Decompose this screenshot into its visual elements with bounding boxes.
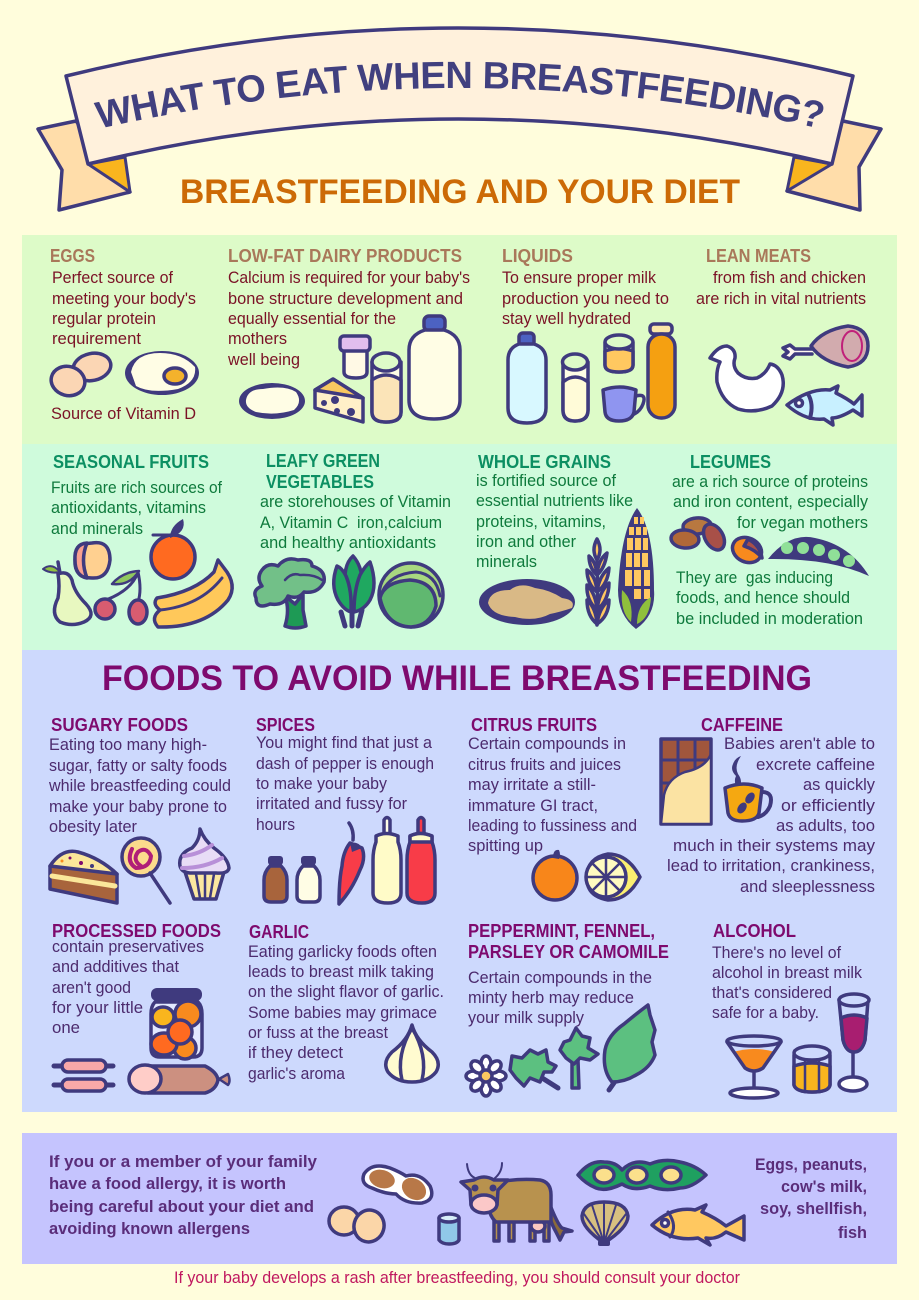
text: lean meats description	[696, 268, 866, 308]
icon: chicken, ham and fish	[710, 326, 868, 425]
section: leafy green vegetables	[255, 451, 451, 628]
section: processed foods: PROCESSED FOODS	[52, 921, 221, 941]
text: spices description: hours	[256, 815, 295, 834]
text: dairy description: equally essential for the	[228, 309, 396, 328]
list: common allergens: cow's milk,	[781, 1177, 867, 1196]
text: herbs description	[468, 968, 652, 1027]
icon: cow	[461, 1163, 572, 1241]
list: common allergens	[755, 1155, 867, 1242]
section: liquids: LIQUIDS	[502, 246, 573, 266]
text: sugary foods description: make your baby prone to	[49, 797, 227, 816]
section: alcohol	[712, 921, 869, 1098]
section: whole grains: WHOLE GRAINS	[478, 452, 611, 472]
panel: food allergy	[22, 1133, 897, 1264]
section: processed foods	[52, 921, 230, 1093]
text: garlic description: leads to breast milk taking	[248, 962, 434, 981]
text: processed foods description: aren't good	[52, 978, 131, 997]
text: whole grains description: minerals	[476, 552, 537, 571]
panel: foods to eat, produce and grains row	[22, 444, 897, 650]
text: whole grains description: essential nutrients like	[476, 491, 633, 510]
section: low-fat dairy products: LOW-FAT DAIRY PRODUCTS	[228, 246, 462, 266]
icon: grain plate, wheat and corn	[479, 508, 654, 629]
text: alcohol description: that's considered	[712, 983, 832, 1002]
text: fruits description	[51, 478, 222, 538]
section: citrus fruits	[468, 715, 640, 900]
section: garlic: GARLIC	[249, 922, 309, 942]
text: caffeine description: much in their systems may	[673, 836, 875, 855]
text: garlic description: Some babies may grimace	[248, 1003, 437, 1022]
icon: eggs	[48, 350, 199, 399]
text: lean meats description: from fish and chicken	[713, 268, 866, 287]
text: processed foods description	[52, 937, 204, 1037]
section: sugary foods: SUGARY FOODS	[51, 715, 188, 735]
section: spices: SPICES	[256, 715, 315, 735]
icon: preserve jar and sausages	[54, 988, 230, 1093]
text: sugary foods description: sugar, fatty or salty foods	[49, 756, 227, 775]
section: low-fat dairy products	[227, 246, 470, 422]
section: peppermint, fennel, parsley or camomile	[466, 921, 669, 1096]
list: common allergens: soy, shellfish,	[760, 1199, 867, 1218]
text: garlic description: garlic's aroma	[248, 1064, 346, 1083]
icon: shell	[582, 1202, 628, 1246]
text: caffeine description: excrete caffeine	[756, 755, 875, 774]
text: vegetables description: and healthy antioxidants	[260, 533, 436, 552]
text: legumes description: foods, and hence should	[676, 588, 850, 607]
list: common allergens: Eggs, peanuts,	[755, 1155, 867, 1174]
section: lean meats	[696, 246, 868, 425]
text: citrus description: citrus fruits and juices	[468, 755, 621, 774]
section: liquids	[502, 246, 675, 423]
section: peppermint, fennel, parsley or camomile: PEPPERMINT, FENNEL,	[468, 921, 655, 941]
text: citrus description: leading to fussiness and	[468, 816, 637, 835]
text: spices description	[256, 733, 434, 834]
text: caffeine description	[667, 734, 876, 896]
section: food allergy text	[49, 1152, 318, 1238]
text: spices description: You might find that just a	[256, 733, 433, 752]
text: citrus description: spitting up	[468, 836, 543, 855]
section: whole grains	[476, 452, 654, 629]
icon: vegetables	[255, 556, 443, 628]
text: sugary foods description: obesity later	[49, 817, 137, 836]
icon: flower and herb leaves	[466, 1005, 655, 1096]
title banner: WHAT TO EAT WHEN BREASTFEEDING?	[94, 62, 824, 128]
text: processed foods description: for your little	[52, 998, 143, 1017]
text: sugary foods description: while breastfeeding could	[48, 776, 231, 795]
section: leafy green vegetables: VEGETABLES	[266, 472, 374, 492]
text: eggs description: regular protein	[52, 309, 156, 328]
text: lean meats description: are rich in vital nutrients	[696, 289, 866, 308]
section: leafy green vegetables: LEAFY GREEN	[266, 451, 380, 471]
text: liquids description: stay well hydrated	[502, 309, 631, 328]
text: processed foods description: contain preservatives	[52, 937, 204, 956]
text: dairy description: well being	[227, 350, 300, 369]
text: eggs description	[51, 268, 196, 423]
section: peppermint, fennel, parsley or camomile: PARSLEY OR CAMOMILE	[468, 942, 669, 962]
section: legumes: LEGUMES	[690, 452, 771, 472]
text: processed foods description: one	[52, 1018, 80, 1037]
panel: foods to eat, protein and dairy row	[22, 235, 897, 444]
text: alcohol description: alcohol in breast milk	[712, 963, 862, 982]
text: citrus description	[468, 734, 637, 855]
text: garlic description: on the slight flavor of garlic.	[248, 982, 444, 1001]
section: alcohol: ALCOHOL	[713, 921, 796, 941]
text: dairy description	[227, 268, 470, 369]
text: dairy description: Calcium is required for your baby's	[228, 268, 470, 287]
text: alcohol description: safe for a baby.	[712, 1003, 819, 1022]
section: eggs: EGGS	[50, 246, 95, 266]
text: citrus description: may irritate a still-	[468, 775, 596, 794]
icon: spice jars, chili and sauce bottles	[264, 818, 435, 904]
text: herbs description: your milk supply	[468, 1008, 584, 1027]
text: legumes description: They are gas inducing	[676, 568, 833, 587]
icon: dairy products	[239, 316, 460, 422]
text: vegetables description	[260, 492, 451, 552]
text: dairy description: mothers	[228, 329, 287, 348]
text: eggs description: requirement	[52, 329, 141, 348]
text: herbs description: Certain compounds in the	[468, 968, 652, 987]
text: fruits description: antioxidants, vitamins	[51, 498, 206, 517]
icon: peanut	[363, 1166, 432, 1205]
text: legumes description: and iron content, especially	[673, 492, 868, 511]
text: alcohol description	[712, 943, 862, 1022]
heading: foods to avoid: FOODS TO AVOID WHILE BREASTFEEDING	[102, 659, 812, 698]
icon: cake, lollipop and cupcake	[50, 829, 229, 903]
section: legumes	[670, 452, 869, 628]
text: legumes description	[672, 472, 868, 628]
text: fruits description: and minerals	[51, 519, 143, 538]
text: legumes description: for vegan mothers	[737, 513, 868, 532]
text: eggs description: Perfect source of	[52, 268, 173, 287]
text: vegetables description: A, Vitamin C iron,calcium	[260, 513, 442, 532]
icon: chocolate bar and coffee	[661, 739, 771, 824]
text: whole grains description: proteins, vitamins,	[476, 512, 606, 531]
text: liquids description: production you need to	[502, 289, 669, 308]
icon: beans and pea pod	[670, 517, 869, 576]
text: sugary foods description: Eating too many high-	[49, 735, 207, 754]
text: garlic description: if they detect	[248, 1043, 343, 1062]
text: liquids description	[502, 268, 669, 328]
text: fruits description: Fruits are rich sources of	[51, 478, 222, 497]
text: caffeine description: as quickly	[803, 775, 875, 794]
text: eggs description: meeting your body's	[52, 289, 196, 308]
icon: fish	[652, 1205, 744, 1245]
text: sugary foods description	[48, 735, 231, 836]
icon: soy pod	[578, 1160, 706, 1190]
text: dairy description: bone structure development and	[228, 289, 463, 308]
text: whole grains description: is fortified source of	[476, 471, 616, 490]
icon: cocktail, tumbler and wine glass	[727, 994, 869, 1098]
section: seasonal fruits: SEASONAL FRUITS	[53, 452, 209, 472]
text: whole grains description	[476, 471, 633, 571]
subtitle: BREASTFEEDING AND YOUR DIET	[180, 173, 740, 211]
icon: eggs	[329, 1207, 388, 1245]
text: legumes description: be included in moderation	[676, 609, 863, 628]
text: garlic description: or fuss at the breast	[248, 1023, 388, 1042]
text: garlic description: Eating garlicky foods often	[248, 942, 437, 961]
text: vegetables description: are storehouses of Vitamin	[260, 492, 451, 511]
text: alcohol description: There's no level of	[712, 943, 841, 962]
text: spices description: to make your baby	[256, 774, 387, 793]
section: food allergy text: have a food allergy, it is worth	[49, 1174, 286, 1193]
section: food allergy text: If you or a member of your family	[49, 1152, 318, 1171]
text: citrus description: Certain compounds in	[468, 734, 626, 753]
section: caffeine	[661, 715, 876, 896]
icon: fruits	[43, 519, 232, 627]
section: spices	[256, 715, 435, 904]
text: spices description: irritated and fussy for	[256, 794, 407, 813]
section: lean meats: LEAN MEATS	[706, 246, 811, 266]
section: garlic	[248, 922, 444, 1083]
panel: foods to avoid	[22, 650, 897, 1112]
text: caffeine description: Babies aren't able to	[724, 734, 875, 753]
footer note: If your baby develops a rash after breastfeeding, you should consult your doctor	[174, 1268, 740, 1287]
text: garlic description	[248, 942, 444, 1083]
text: processed foods description: and additives that	[52, 957, 179, 976]
icon: garlic	[386, 1025, 438, 1082]
text: liquids description: To ensure proper milk	[502, 268, 656, 287]
text: spices description: dash of pepper is enough	[256, 754, 434, 773]
section: food allergy text: avoiding known allergens	[49, 1219, 250, 1238]
icon: drinks	[508, 324, 675, 423]
section: sugary foods	[48, 715, 231, 903]
list: common allergens: fish	[838, 1223, 867, 1242]
icon: orange and lemon	[533, 850, 640, 900]
icon: glass of milk	[439, 1214, 459, 1244]
text: herbs description: minty herb may reduce	[468, 988, 634, 1007]
text: caffeine description: lead to irritation, crankiness,	[667, 856, 875, 875]
section: citrus fruits: CITRUS FRUITS	[471, 715, 597, 735]
text: caffeine description: and sleeplessness	[740, 877, 875, 896]
text: caffeine description: as adults, too	[776, 816, 875, 835]
text: caffeine description: or efficiently	[781, 796, 876, 815]
section: food allergy text: being careful about your diet and	[49, 1197, 314, 1216]
title banner	[36, 26, 883, 212]
text: legumes description: are a rich source of proteins	[672, 472, 868, 491]
section: seasonal fruits	[43, 452, 232, 627]
text: whole grains description: iron and other	[476, 532, 576, 551]
text: citrus description: immature GI tract,	[468, 796, 598, 815]
section: eggs	[48, 246, 199, 423]
section: caffeine: CAFFEINE	[701, 715, 783, 735]
text: eggs description: Source of Vitamin D	[51, 404, 196, 423]
